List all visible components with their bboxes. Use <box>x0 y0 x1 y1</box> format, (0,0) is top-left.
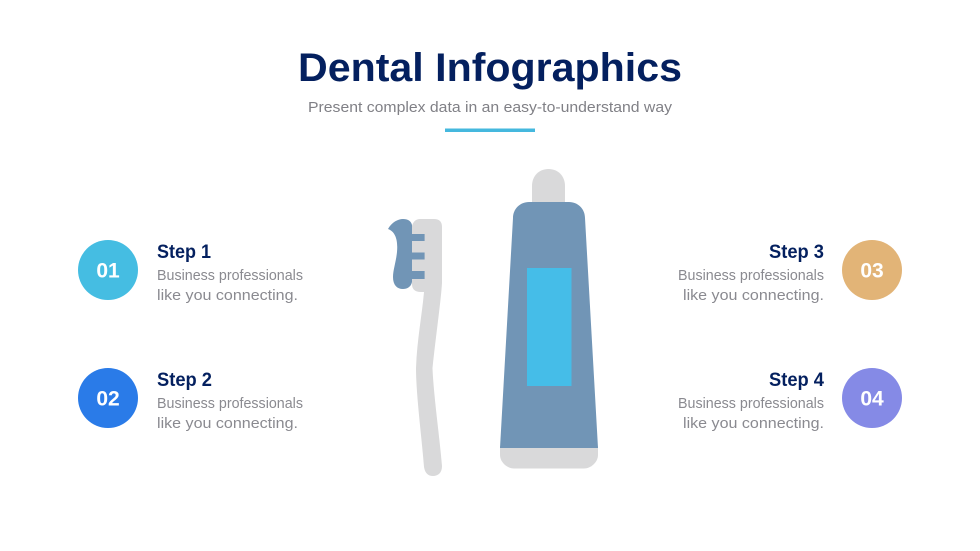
step 3 text: like you connecting. <box>683 288 824 304</box>
toothbrush body <box>412 219 442 476</box>
step 1 <box>78 240 303 304</box>
step 2 <box>78 368 303 432</box>
tube crimped end <box>500 446 598 468</box>
step 1 badge: 01 <box>96 260 120 282</box>
step 3 badge: 03 <box>860 260 884 282</box>
step 4 <box>678 368 902 432</box>
step 4 badge <box>842 368 902 428</box>
title underline <box>445 128 535 132</box>
step 4 badge: 04 <box>860 388 884 410</box>
step 1 badge <box>78 240 138 300</box>
icon: toothbrush <box>388 219 442 476</box>
step 1 text: like you connecting. <box>157 288 298 304</box>
subtitle: Present complex data in an easy-to-understand way <box>308 99 673 116</box>
step 2 text <box>157 396 303 432</box>
step 4 heading: Step 4 <box>769 369 824 391</box>
tube cap <box>532 169 565 204</box>
step 1 text: Business professionals <box>157 268 303 284</box>
step 2 badge: 02 <box>96 388 120 410</box>
step 3 text: Business professionals <box>678 268 824 284</box>
step 2 heading: Step 2 <box>157 369 212 391</box>
step 4 text: like you connecting. <box>683 416 824 432</box>
icon: toothpaste tube <box>500 169 598 468</box>
step 1 heading: Step 1 <box>157 241 211 263</box>
step 1 text <box>157 268 303 304</box>
step 3 text <box>678 268 824 304</box>
toothbrush blue pad <box>388 219 412 289</box>
step 2 text: like you connecting. <box>157 416 298 432</box>
step 3 <box>678 240 902 304</box>
step 3 heading: Step 3 <box>769 241 824 263</box>
toothbrush bristles <box>410 234 425 279</box>
title: Dental Infographics <box>298 46 682 90</box>
step 4 text <box>678 396 824 432</box>
step 2 badge <box>78 368 138 428</box>
step 4 text: Business professionals <box>678 396 824 412</box>
step 2 text: Business professionals <box>157 396 303 412</box>
tube label <box>527 268 572 386</box>
step 3 badge <box>842 240 902 300</box>
tube body <box>500 202 598 448</box>
